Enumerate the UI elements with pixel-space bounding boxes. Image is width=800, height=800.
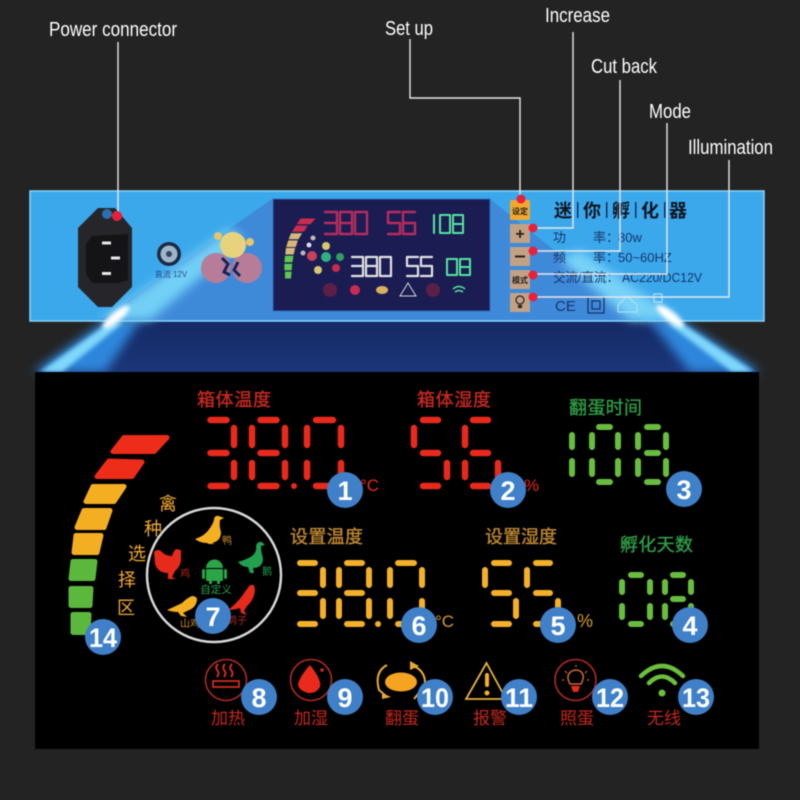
number badge 8 [241,679,277,715]
icon: DC jack [155,242,188,279]
button: set up [510,200,530,220]
callout label: power connector: Power connector [49,19,177,41]
mini level bars [284,218,316,278]
device specifications: 交流/直流： [553,270,619,285]
device title: 孵 [612,201,630,221]
icon: chicken: 鸡 [180,567,190,580]
status icon: heating [206,660,246,728]
callout label: illumination: Illumination [688,137,773,159]
device specifications: AC220/DC12V [622,270,702,285]
number badge 1: 1 [337,476,353,506]
icon: DC jack: 直流 12V [155,269,188,279]
number badge 11 [501,679,537,715]
certification icons: CE [555,298,576,315]
level bar chart [71,438,167,632]
number badge 2: 2 [500,476,516,506]
number badge 10: 10 [421,683,449,713]
device specifications: 50~60HZ [618,250,672,265]
status icon: wireless [641,666,683,728]
number badge 14: 14 [89,623,117,653]
callout label: cut back [528,56,658,256]
light flares at device corners [100,302,686,332]
callout label: increase [528,5,610,232]
panel: device front [30,191,764,321]
device title: 器 [669,201,687,221]
status icon: alarm: 报警 [473,709,507,728]
readout: egg turning time [569,398,666,482]
device specifications: 80w [618,230,642,245]
icon: pheasant: 山鸡 [180,617,200,630]
device specifications: 功 [553,230,566,245]
number badge 6: 6 [411,611,427,641]
number badge 4: 4 [682,611,698,641]
number badge 11: 11 [505,683,533,713]
icon: duck: 鸭 [222,534,232,547]
device specifications: 频 [553,250,566,265]
number badge 12 [592,679,628,715]
device specifications [553,230,702,285]
vertical label: breed selection area: 择 [118,570,136,590]
number badge 6 [401,607,437,643]
device specifications: 率： [593,230,619,245]
mini bird wheel [300,236,344,274]
readout: egg turning time: 翻蛋时间 [569,398,642,418]
button: illumination [510,293,530,312]
callout label: mode [528,101,691,280]
vertical label: breed selection area: 种 [144,519,162,539]
status icon: egg candling: 照蛋 [560,709,594,728]
number badge 5: 5 [550,611,566,641]
readout: set temperature [290,527,454,631]
status icon: egg candling [555,660,596,728]
number badge 7: 7 [205,602,221,632]
number badge 3 [666,471,702,507]
icon: power socket [78,208,132,307]
number badge 1 [327,472,363,508]
icon: chick in egg logo [201,232,262,283]
vertical label: breed selection area: 选 [128,544,146,564]
readout: set temperature: 设置温度 [290,527,363,547]
number badge 12: 12 [596,683,624,713]
readout: box temperature: 箱体温度 [197,390,271,410]
vertical label: breed selection area: 区 [117,598,135,618]
mini readouts [325,212,415,234]
vertical label: breed selection area [117,494,177,618]
callout label: illumination [528,137,773,302]
callout label: set up: Set up [385,18,433,40]
button: mode: 模式 [512,275,528,285]
readout: hatching days [620,535,693,624]
status icon: egg turning [378,661,425,728]
device title [554,200,687,221]
callout label: power connector [49,19,177,221]
navy light base under the device [33,321,761,372]
number badge 4 [672,607,708,643]
callout label: increase: Increase [545,5,610,27]
readout: box humidity: % [524,476,539,495]
icon: goose: 鹅 [262,565,272,578]
button: mode [510,270,530,289]
number badge 8: 8 [251,683,267,713]
icon: custom android: 自定义 [200,583,232,596]
status icon: egg turning: 翻蛋 [385,709,419,728]
vertical label: breed selection area: 禽 [159,494,177,514]
breed selection wheel [147,508,281,642]
number badge 5 [540,607,576,643]
certification icons [555,294,662,315]
readout: box temperature: °C [360,476,379,495]
mini status icons [323,283,465,297]
number badge 10 [417,679,453,715]
number badge 13: 13 [682,683,710,713]
readout: hatching days: 孵化天数 [620,535,693,555]
device title: 你 [583,201,601,221]
number badge 9: 9 [337,683,353,713]
number badge 2 [490,472,526,508]
callout label: cut back: Cut back [591,56,658,78]
status icon: humidifying [290,660,332,728]
icon: pigeon: 鸽子 [227,614,247,627]
button: increase: + [515,226,525,243]
callout label: set up [385,18,526,204]
number badge 13 [678,679,714,715]
readout: set humidity: % [577,611,593,631]
status icon: heating: 加热 [211,709,245,728]
button: cut back [510,247,530,266]
button: increase [510,224,530,243]
device title: 化 [641,200,659,221]
callout label: mode: Mode [649,101,691,123]
readout: box humidity [414,390,539,495]
status icon: wireless: 无线 [647,709,681,728]
readout: set temperature: °C [435,612,454,631]
device specifications: 率： [593,250,619,265]
readout: set humidity [485,527,593,631]
number badge 7 [195,598,231,634]
status icon: humidifying: 加湿 [294,709,328,728]
button: set up: 设定 [512,206,528,216]
panel: miniature LCD screen [273,199,490,311]
device title: 迷 [554,201,572,221]
readout: box humidity: 箱体湿度 [417,390,491,410]
number badge 14 [85,619,121,655]
status icon: alarm [466,663,507,728]
readout: box temperature [197,390,379,495]
number badge 9 [327,679,363,715]
panel: enlarged LCD display [35,372,759,749]
readout: set humidity: 设置湿度 [485,527,557,547]
number badge 3: 3 [676,475,692,505]
